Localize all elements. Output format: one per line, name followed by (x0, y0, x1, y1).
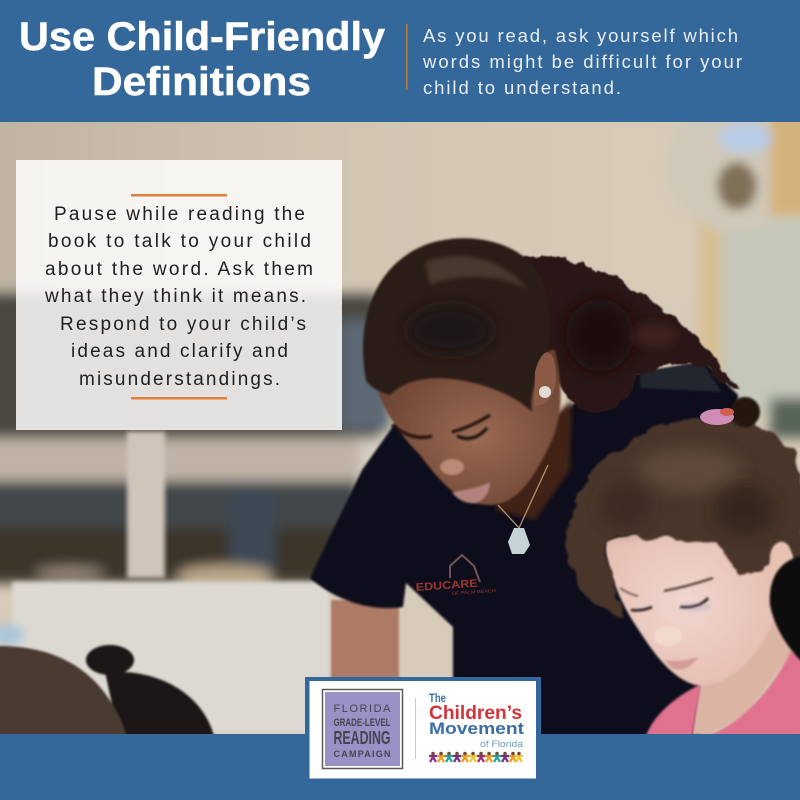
logo: Florida Grade-Level Reading Campaign (322, 690, 402, 768)
logo divider (415, 698, 416, 759)
title (19, 15, 386, 104)
child: neck (692, 600, 792, 735)
teacher: shirt logo (415, 555, 496, 596)
panel bottom rule (131, 397, 227, 400)
foreground child heads (0, 645, 215, 740)
logo: The Children's Movement of Florida (429, 693, 524, 750)
intro text: child to understand. (423, 77, 621, 98)
panel body text: about the word. Ask them (45, 259, 313, 280)
teacher: shirt logo: OF PALM BEACH (452, 588, 496, 596)
classroom table (12, 582, 330, 734)
logo: The Children's Movement of Florida: Movement (429, 719, 524, 738)
logo: Florida Grade-Level Reading Campaign: FLORIDA (334, 703, 391, 715)
teacher: shirt logo: EDUCARE (415, 578, 478, 594)
child: hair (568, 418, 800, 618)
child: hair tie and bun (700, 397, 760, 427)
header divider (406, 24, 408, 90)
teacher: ponytail (515, 255, 738, 411)
panel top rule (131, 194, 227, 196)
teacher: polo shirt (310, 362, 738, 740)
teacher: ear and earring (534, 352, 556, 405)
panel body text: book to talk to your child (48, 231, 311, 252)
title: Use Child-Friendly (19, 15, 386, 59)
teacher: eyes, nose and mouth (392, 415, 490, 503)
panel body text: Pause while reading the (54, 204, 305, 225)
child: pink shirt (646, 651, 800, 736)
panel body text (44, 204, 313, 390)
panel body text: what they think it means. (44, 286, 306, 307)
panel body text: Respond to your child’s (60, 314, 306, 335)
child: ear (770, 542, 791, 580)
teacher: neck (495, 400, 572, 520)
teacher: face (378, 350, 561, 505)
logo: Florida Grade-Level Reading Campaign: READING (334, 728, 390, 748)
foreground dark shape at right edge (770, 556, 800, 662)
teacher: arm (331, 600, 399, 740)
title: Definitions (92, 60, 311, 104)
teacher: shirt collar (640, 362, 722, 392)
intro text: As you read, ask yourself which (423, 25, 738, 46)
text panel (16, 160, 342, 430)
intro text (422, 25, 742, 98)
logo: The Children's Movement of Florida: of Florida (480, 739, 524, 750)
logo: The Children's Movement of Florida: The (429, 693, 446, 705)
teacher: hair (363, 238, 550, 412)
logo card (305, 677, 541, 781)
logo: Florida Grade-Level Reading Campaign: CAMPAIGN (334, 749, 390, 759)
teacher: necklace and pendant (498, 465, 548, 554)
header band (0, 0, 800, 122)
panel body text: ideas and clarify and (71, 341, 288, 362)
logo: The Children's Movement of Florida: Children’s (429, 703, 522, 724)
child: face (606, 520, 782, 685)
logo: Florida Grade-Level Reading Campaign: GRADE-LEVEL (334, 717, 391, 729)
logo: paper-doll chain (429, 752, 523, 762)
child: eyes, nose and mouth (620, 578, 713, 670)
intro text: words might be difficult for your (422, 51, 742, 72)
footer band (0, 734, 800, 800)
panel body text: misunderstandings. (79, 369, 280, 390)
